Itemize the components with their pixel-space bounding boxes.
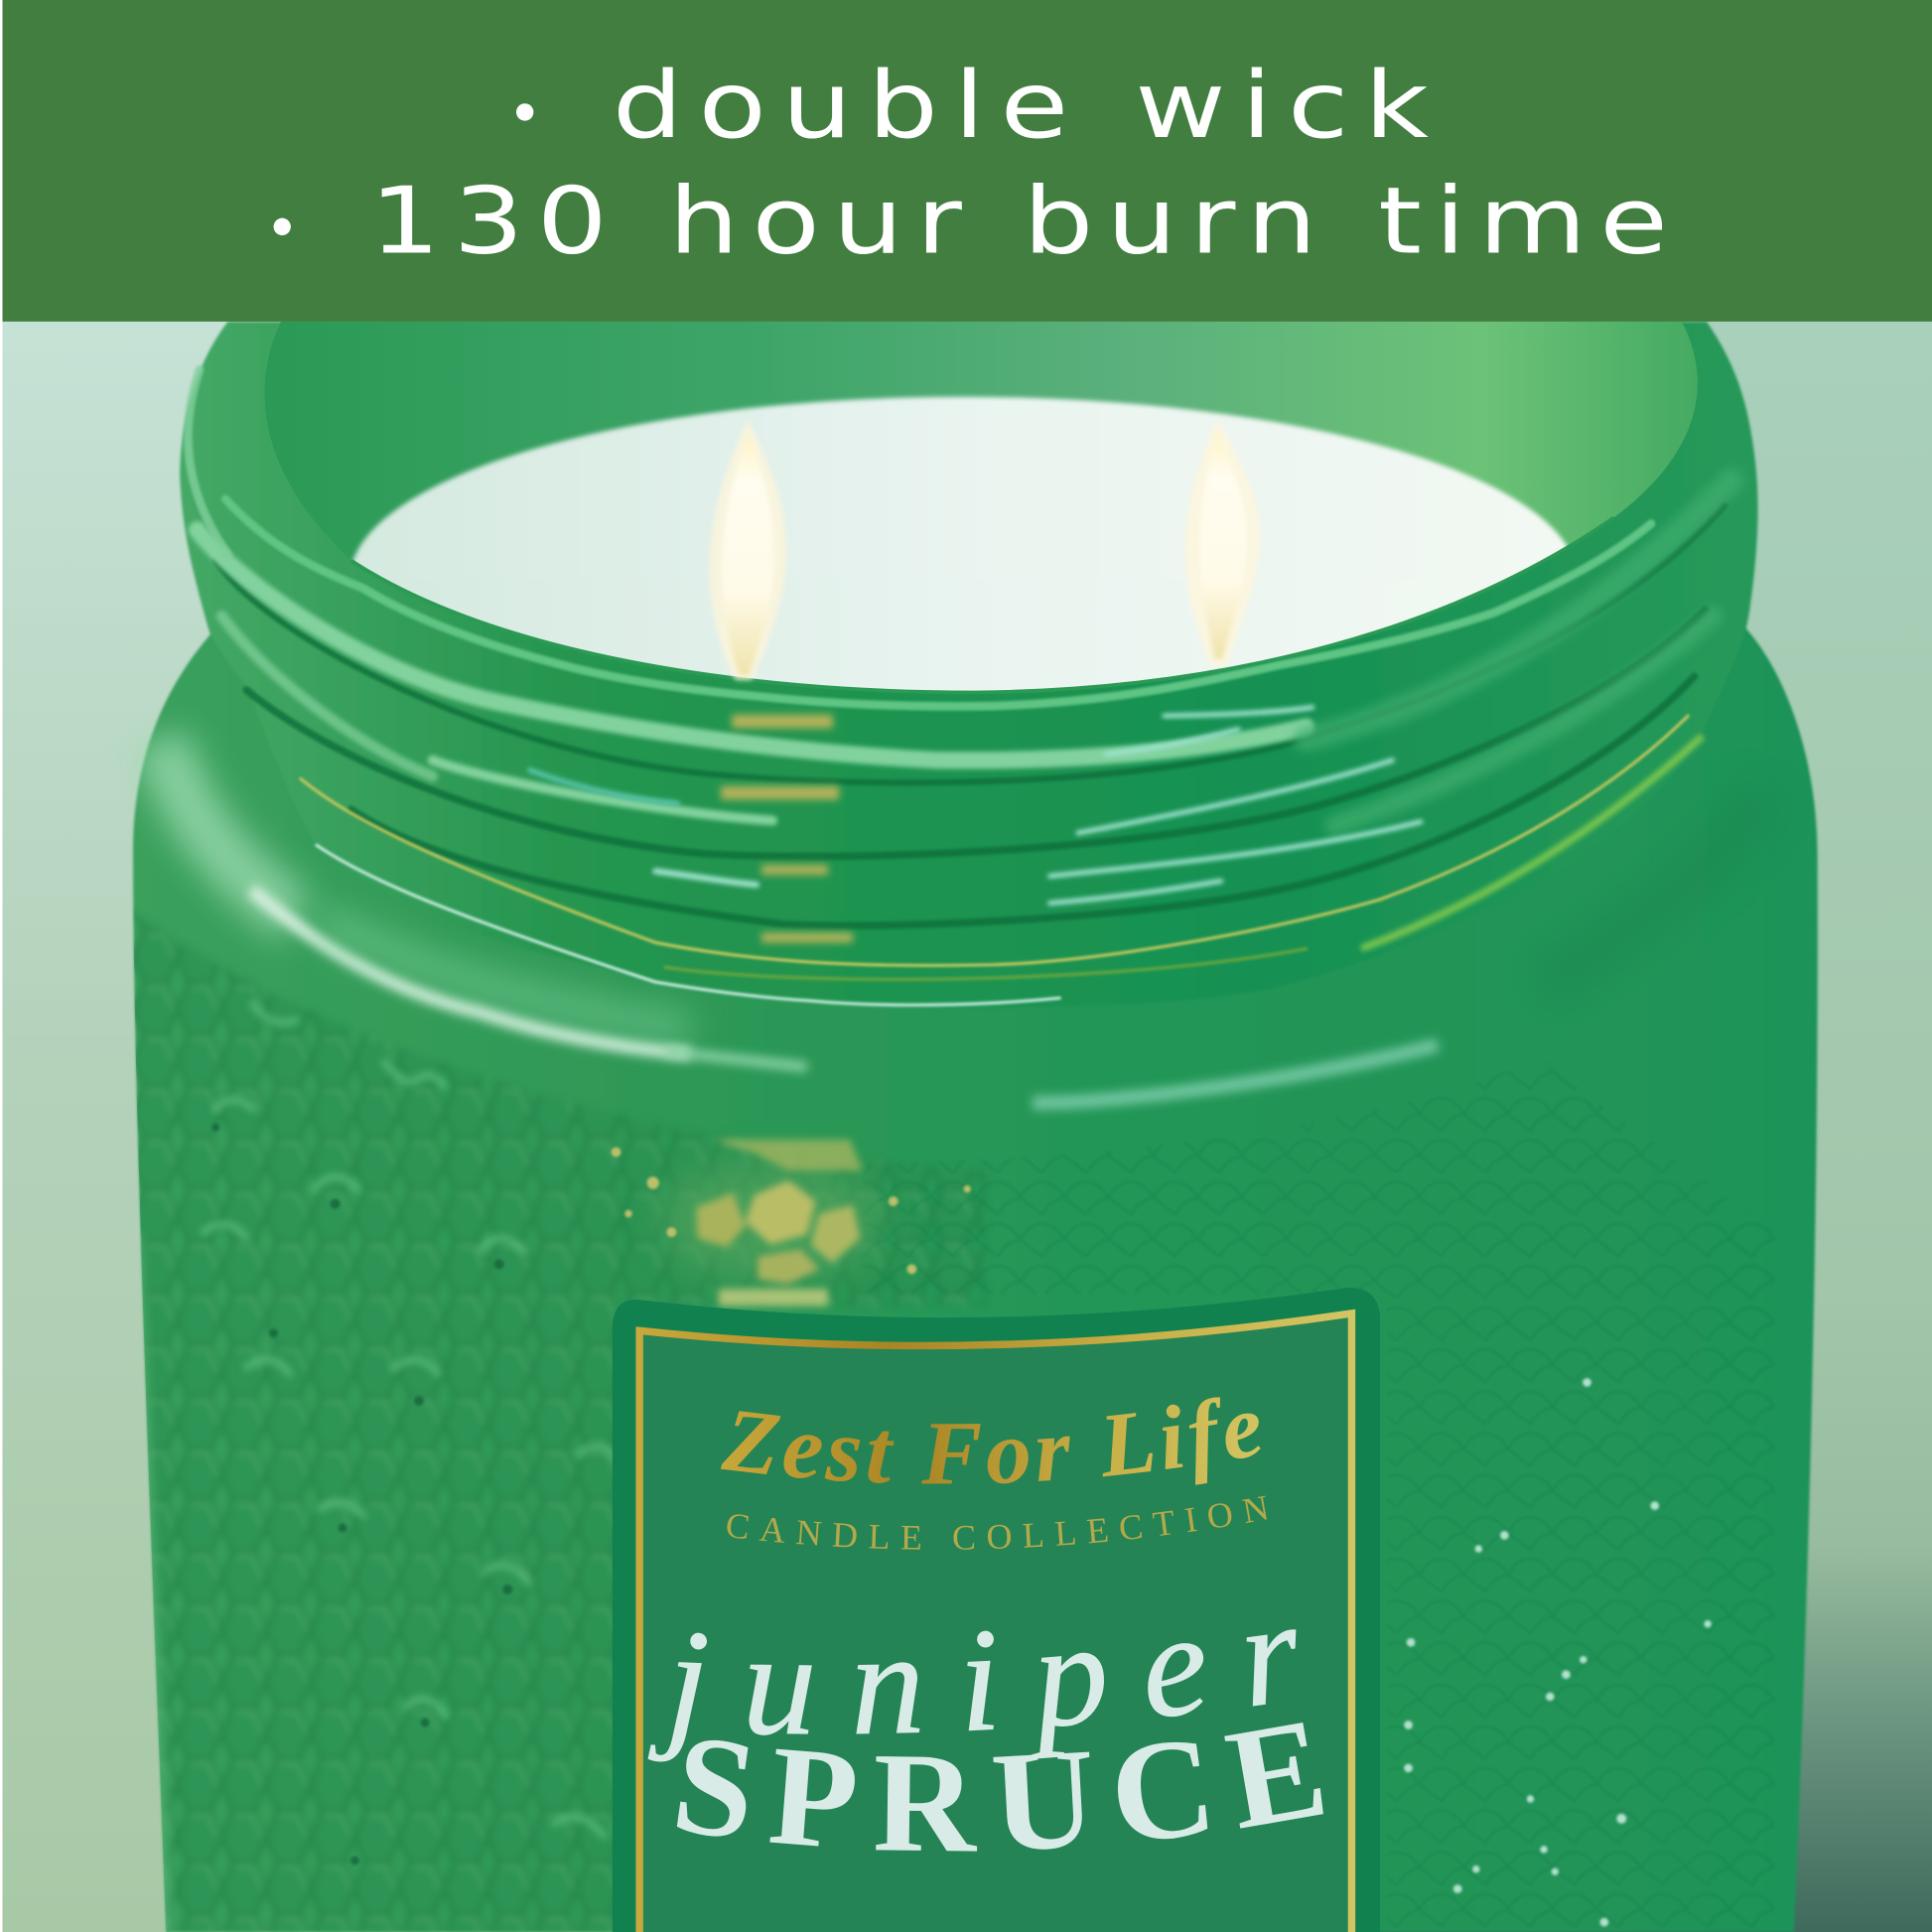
- feature: double wick: double wick: [613, 53, 1429, 159]
- feature: 130 hour burn time: 130 hour burn time: [369, 168, 1668, 275]
- pale relief blotches on glass: [204, 1004, 617, 1836]
- honeycomb glass texture: [123, 905, 1774, 1932]
- candle jar: [123, 322, 1818, 1932]
- sparkle specks on glass: [1404, 1378, 1712, 1926]
- rim edge highlights: [188, 369, 1651, 706]
- gold reflection on honeycomb: [612, 1140, 971, 1307]
- scent name juniper: juniper: [647, 1629, 1297, 1761]
- pale rim and ridge highlights: [198, 530, 1307, 821]
- gold lines: [301, 716, 1701, 1005]
- teal glints: [530, 707, 1421, 903]
- scent name spruce: SPRUCE: [677, 1723, 1323, 1852]
- gold border: [639, 1313, 1351, 1932]
- label inner panel: [639, 1313, 1351, 1932]
- wax surface: [349, 393, 1570, 691]
- rim inner edge over wax: [351, 517, 1614, 692]
- inner glass wall: [265, 322, 1698, 692]
- shoulder gloss highlights: [160, 740, 1762, 1103]
- gold reflections on threads: [721, 715, 853, 942]
- top banner: [2, 0, 1932, 322]
- jar body: [133, 627, 1818, 1932]
- glass pits: [211, 1124, 512, 1864]
- product label: [612, 1288, 1380, 1932]
- threaded neck and rim silhouette: [180, 322, 1758, 1008]
- collection line: CANDLE COLLECTION: [727, 1495, 1267, 1550]
- grooves: [215, 505, 1725, 925]
- brand name: Zest For Life: [721, 1397, 1261, 1485]
- candle flame left: [710, 421, 786, 680]
- label sticker: [613, 1288, 1380, 1932]
- thread ridges: [198, 481, 1731, 1005]
- candle flame right: [1185, 419, 1260, 665]
